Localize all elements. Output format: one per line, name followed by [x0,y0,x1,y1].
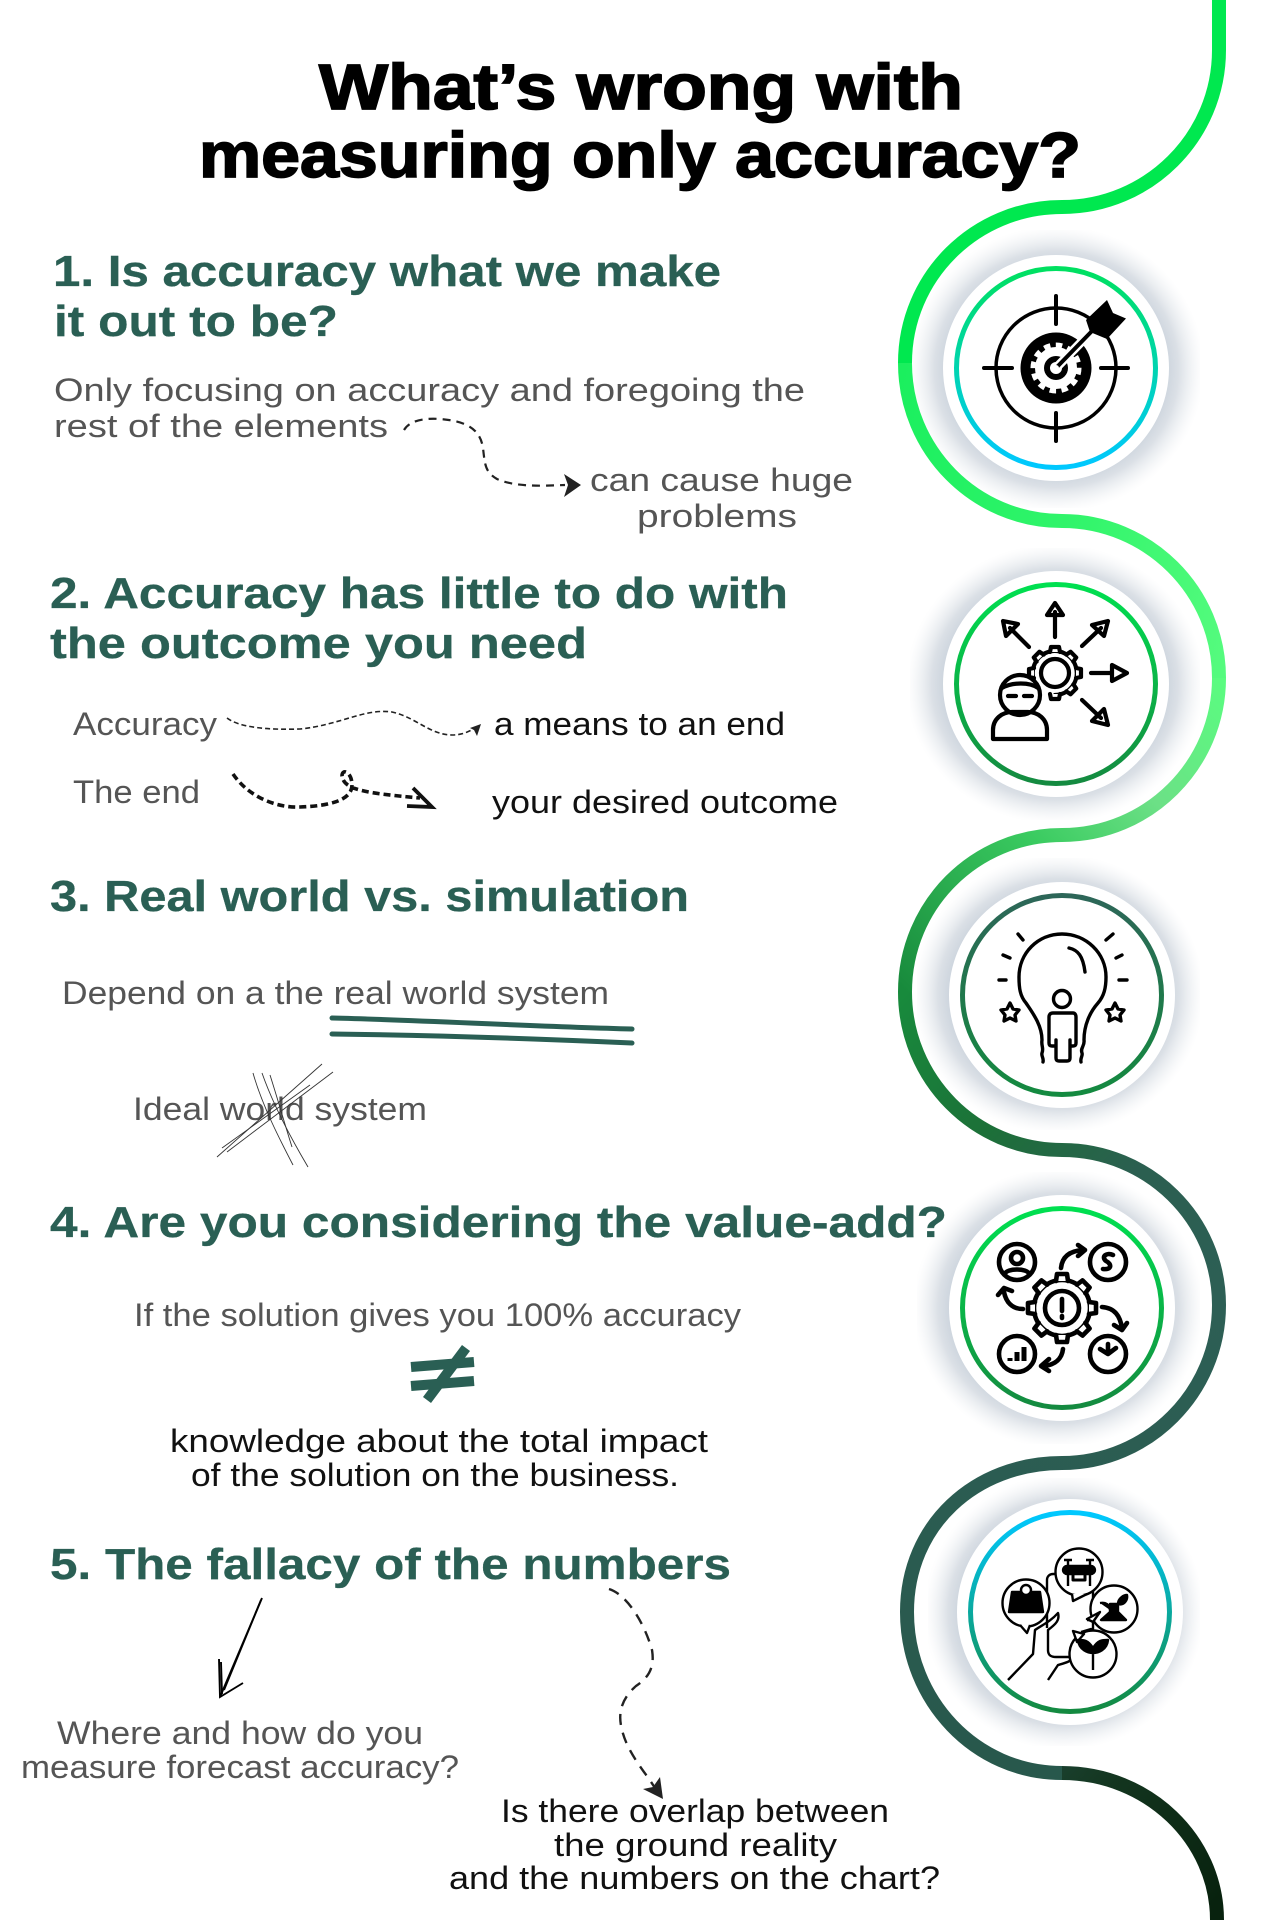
body text 1: Only focusing on accuracy and foregoing the [54,372,805,408]
heading 1 [53,247,721,346]
body text 1: rest of the elements [54,408,388,444]
text forecast accuracy [21,1715,459,1785]
title: What’s wrong with [319,51,963,123]
icon: bulb with person [999,934,1127,1062]
thick dashed arrow [233,772,432,807]
not equal sign [411,1348,474,1400]
heading 2: the outcome you need [50,619,587,668]
text forecast accuracy: Where and how do you [57,1715,423,1751]
heading 4: 4. Are you considering the value-add? [50,1198,947,1247]
double underline [332,1018,632,1043]
heading 2 [50,569,788,668]
scribbled cross [217,1064,333,1167]
text 100 percent accuracy: If the solution gives you 100% accuracy [134,1297,741,1333]
winding path line [905,0,1219,1920]
text ground reality: the ground reality [554,1827,837,1863]
body text 1 continued: problems [637,498,797,534]
dashed arrow 5 [609,1589,663,1799]
heading 2: 2. Accuracy has little to do with [50,569,788,618]
body text 1 continued [590,462,853,534]
text total impact: of the solution on the business. [191,1457,679,1493]
text total impact [170,1423,708,1493]
icon: person, gear, arrows [993,603,1127,739]
body text 1 continued: can cause huge [590,462,853,498]
text ideal world: Ideal world system [133,1091,427,1127]
section 1 [53,247,853,534]
text ground reality [449,1793,940,1896]
section 2 [50,569,838,820]
label desired outcome: your desired outcome [492,784,838,820]
section 4 [50,1198,947,1493]
icon: target with dart [984,296,1128,441]
heading 3: 3. Real world vs. simulation [50,872,689,921]
dashed arrow 1 [404,419,581,497]
icon: gear with four circles [998,1244,1127,1372]
label accuracy: Accuracy [73,706,217,742]
label the end: The end [73,774,200,810]
text forecast accuracy: measure forecast accuracy? [21,1749,459,1785]
heading 1: it out to be? [54,297,338,346]
badge 1: target [943,255,1169,481]
badge 4: gear and cycle [949,1195,1175,1421]
heading 5: 5. The fallacy of the numbers [50,1540,731,1589]
section 3 [50,872,689,1167]
text real world: Depend on a the real world system [62,975,609,1011]
badge soft shadows [910,230,1200,1746]
heading 1: 1. Is accuracy what we make [53,247,721,296]
badge 2: person with arrows [943,571,1169,797]
text ground reality: Is there overlap between [501,1793,889,1829]
title: measuring only accuracy? [199,119,1081,191]
icon: hand, phone, speech bubbles [1002,1548,1138,1680]
sketched arrow [219,1598,262,1697]
body text 1 [54,372,805,444]
text ground reality: and the numbers on the chart? [449,1860,940,1896]
badge 5: hand with phone [957,1499,1183,1725]
label means to an end: a means to an end [494,706,785,742]
section 5 [21,1540,940,1896]
title [199,51,1081,191]
badge 3: light bulb [949,882,1175,1108]
thin dashed arrow [227,711,481,736]
text total impact: knowledge about the total impact [170,1423,708,1459]
